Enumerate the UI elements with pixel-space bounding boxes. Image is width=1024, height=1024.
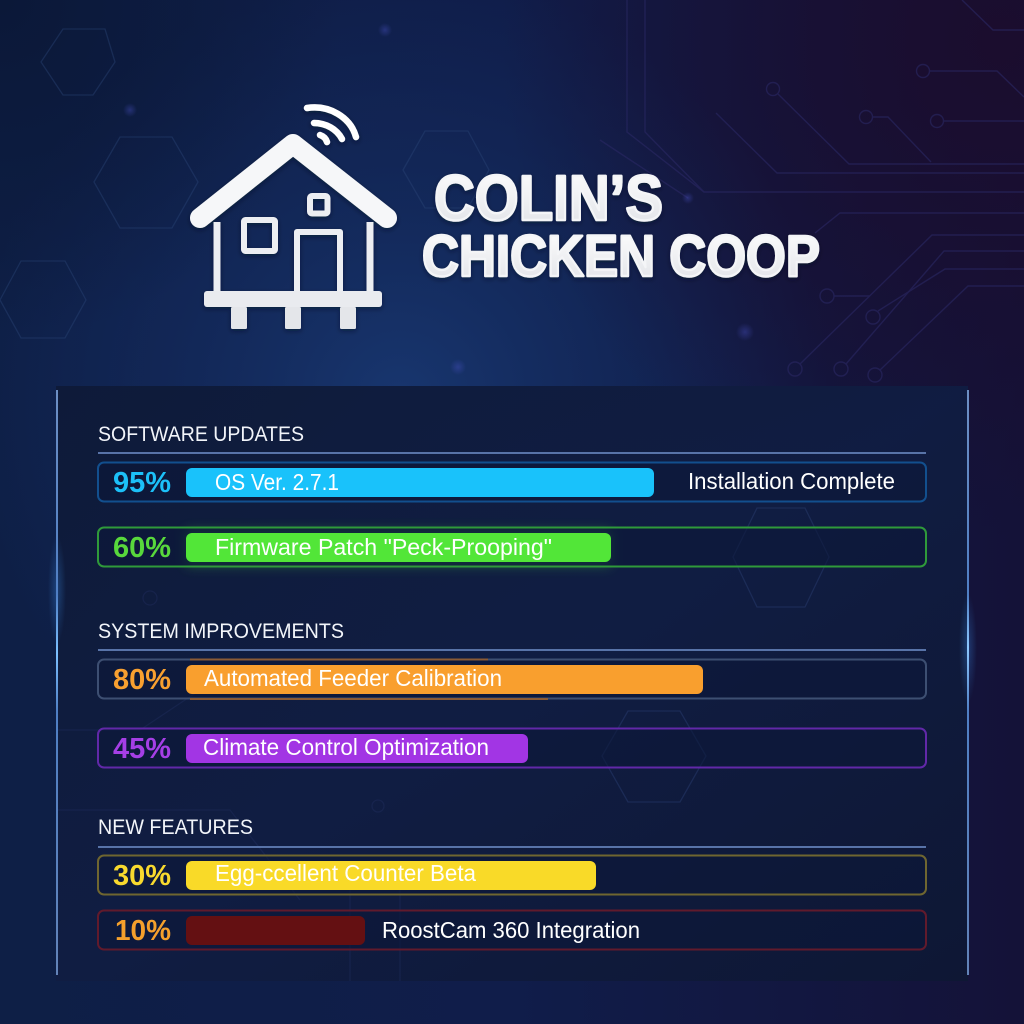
small window <box>310 196 328 214</box>
row: firmware patch: Firmware Patch "Peck-Prooping" <box>215 534 552 560</box>
section: system improvements <box>98 620 926 768</box>
title line 1: COLIN’S <box>434 162 663 234</box>
row: feeder calibration <box>98 658 926 700</box>
section: new features <box>98 816 926 950</box>
heading: new features: NEW FEATURES <box>98 816 253 839</box>
wifi signal <box>307 107 356 142</box>
row: feeder calibration: Automated Feeder Calibration <box>204 665 502 691</box>
background circuit traces <box>600 0 1024 382</box>
row: roostcam <box>98 910 926 950</box>
row: firmware patch: 60% <box>113 532 171 564</box>
section: software updates <box>98 423 926 566</box>
heading: software updates: SOFTWARE UPDATES <box>98 423 304 446</box>
row: egg counter: 30% <box>113 860 171 892</box>
background light specks <box>123 23 754 375</box>
row: egg counter <box>98 856 926 894</box>
row: climate control: Climate Control Optimization <box>203 734 489 760</box>
row: OS version: 95% <box>113 467 171 499</box>
legs <box>231 307 356 329</box>
background hexagons <box>0 29 489 338</box>
heading: system improvements: SYSTEM IMPROVEMENTS <box>98 620 344 643</box>
roof <box>200 144 387 218</box>
panel: update list <box>48 386 977 981</box>
row: firmware patch <box>98 528 926 566</box>
row: egg counter: Egg-ccellent Counter Beta <box>215 860 476 886</box>
house walls <box>217 222 370 293</box>
large window <box>244 220 275 251</box>
row: OS version: Installation Complete <box>688 468 895 494</box>
right edge light <box>959 390 977 975</box>
platform <box>204 291 382 307</box>
panel inner hexagons and traces <box>56 508 829 981</box>
icon: smart coop house with wifi <box>200 107 387 329</box>
title line 2: CHICKEN COOP <box>422 224 820 289</box>
row: climate control <box>98 728 926 768</box>
row: roostcam: 10% <box>115 915 171 947</box>
row: OS version <box>98 462 926 502</box>
left edge light <box>48 390 66 975</box>
row: roostcam: RoostCam 360 Integration <box>382 917 640 943</box>
title <box>422 162 820 289</box>
row: feeder calibration: 80% <box>113 664 171 696</box>
row: climate control: 45% <box>113 733 171 765</box>
panel background <box>56 386 968 981</box>
row: OS version: OS Ver. 2.7.1 <box>215 469 339 495</box>
door <box>297 232 340 293</box>
